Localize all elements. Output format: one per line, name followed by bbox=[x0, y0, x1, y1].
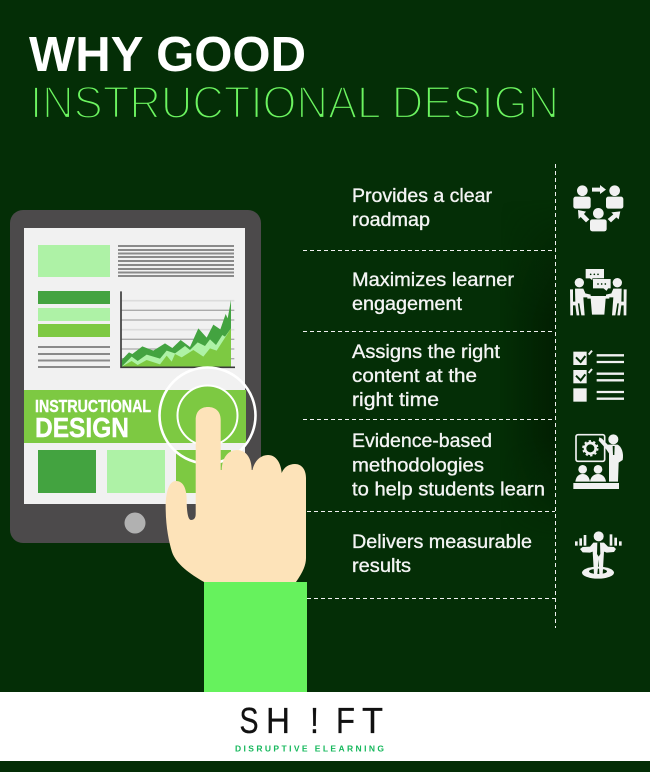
banner text bbox=[35, 396, 151, 443]
icon: presenter bbox=[573, 434, 623, 489]
item 5 text bbox=[352, 531, 532, 577]
banner bbox=[24, 390, 246, 443]
footer band bbox=[0, 692, 650, 761]
icon: meeting bbox=[570, 269, 627, 315]
title: INSTRUCTIONAL DESIGN bbox=[30, 77, 559, 128]
item 3 text: content at the bbox=[352, 365, 477, 387]
bottom strip bbox=[0, 761, 650, 772]
item 3 text: right time bbox=[352, 389, 439, 411]
logo: SHIFT: S bbox=[240, 700, 258, 741]
item 2 text bbox=[352, 269, 515, 315]
item 5 text: Delivers measurable bbox=[352, 531, 532, 553]
title: WHY GOOD bbox=[29, 28, 306, 82]
icon: checklist bbox=[573, 351, 624, 402]
item 3 text bbox=[352, 341, 501, 411]
title bbox=[29, 28, 559, 128]
area chart bbox=[121, 291, 235, 367]
item 4 text: Evidence-based bbox=[352, 430, 492, 452]
touch rings bbox=[160, 368, 256, 464]
logo tagline: DISRUPTIVE ELEARNING bbox=[235, 744, 384, 754]
icon: results figure bbox=[575, 531, 622, 579]
bottom squares bbox=[38, 450, 231, 493]
item 4 text: to help students learn bbox=[352, 478, 545, 500]
text lines left bbox=[38, 346, 110, 368]
item 5 text: results bbox=[352, 555, 411, 577]
home button bbox=[124, 512, 146, 534]
dashed dividers bbox=[303, 164, 556, 628]
item 4 text bbox=[352, 430, 545, 500]
item 1 text: roadmap bbox=[352, 209, 430, 231]
item 4 text: methodologies bbox=[352, 454, 484, 476]
tablet body bbox=[10, 210, 261, 543]
item 3 text: Assigns the right bbox=[352, 341, 501, 363]
banner text: DESIGN bbox=[35, 412, 129, 443]
logo: SHIFT: T bbox=[362, 700, 383, 741]
item 1 text: Provides a clear bbox=[352, 185, 492, 207]
tablet screen bbox=[24, 228, 245, 504]
text lines top bbox=[118, 245, 234, 277]
tablet illustration bbox=[10, 210, 261, 543]
sleeve bbox=[204, 582, 307, 692]
logo: SHIFT: H bbox=[266, 700, 290, 741]
item 2 text: engagement bbox=[352, 293, 463, 315]
icon: roadmap people bbox=[573, 185, 623, 231]
logo: SHIFT: ! bbox=[310, 700, 319, 741]
colour bars bbox=[38, 291, 110, 337]
logo: SHIFT bbox=[240, 700, 383, 741]
item 2 text: Maximizes learner bbox=[352, 269, 515, 291]
benefit list bbox=[352, 185, 545, 577]
item 1 text bbox=[352, 185, 492, 231]
image block bbox=[38, 245, 110, 277]
banner text: INSTRUCTIONAL bbox=[35, 396, 151, 416]
hand bbox=[166, 407, 306, 582]
logo: SHIFT: F bbox=[336, 700, 355, 741]
